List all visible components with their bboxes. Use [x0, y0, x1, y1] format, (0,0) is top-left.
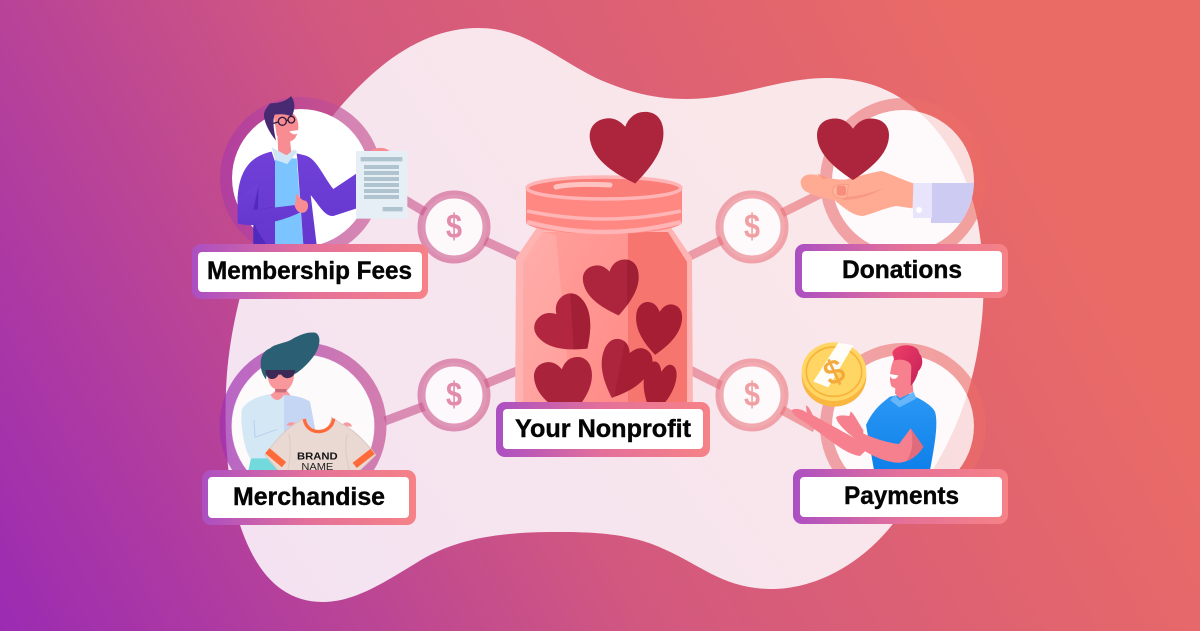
panel: donations circle [801, 104, 980, 258]
panel: merchandise circle [226, 332, 380, 504]
jar lid [526, 188, 682, 234]
person: man with coin [792, 342, 936, 470]
label: Your Nonprofit [496, 402, 710, 457]
label: Membership Fees [192, 244, 428, 299]
label: Payments [793, 469, 1008, 524]
label: Payments: Payments [844, 482, 959, 510]
dollar badge: top right [720, 194, 784, 260]
person: woman with t-shirt [241, 332, 376, 487]
person: woman with t-shirt: BRAND [297, 451, 338, 462]
dollar badge: bottom left [422, 362, 486, 428]
top falling heart [587, 109, 672, 190]
person: man with paper [238, 96, 407, 245]
dollar badge: bottom right [720, 362, 784, 428]
dollar badge: top left [422, 194, 486, 260]
connector lines [380, 185, 824, 428]
label: Merchandise [202, 470, 416, 525]
label: Merchandise: Merchandise [233, 483, 385, 511]
illustration: hand holding heart [801, 119, 977, 223]
jar body [515, 226, 693, 420]
jar [515, 177, 693, 422]
dollar badge: top right: $ [744, 208, 760, 246]
label: Donations [795, 244, 1008, 298]
dollar badge: top left: $ [446, 208, 462, 246]
dollar badge: bottom left: $ [446, 376, 462, 414]
dollar badge: bottom right: $ [744, 376, 760, 414]
person: woman with t-shirt: NAME [301, 462, 333, 473]
panel: membership fees circle [226, 96, 407, 253]
background blob [226, 28, 984, 602]
jar hearts [534, 260, 682, 402]
label: Your Nonprofit: Your Nonprofit [515, 415, 692, 443]
label: Membership Fees: Membership Fees [207, 257, 412, 285]
person: man with coin: $ [818, 352, 851, 393]
label: Donations: Donations [842, 256, 962, 284]
panel: payments circle [792, 342, 980, 503]
